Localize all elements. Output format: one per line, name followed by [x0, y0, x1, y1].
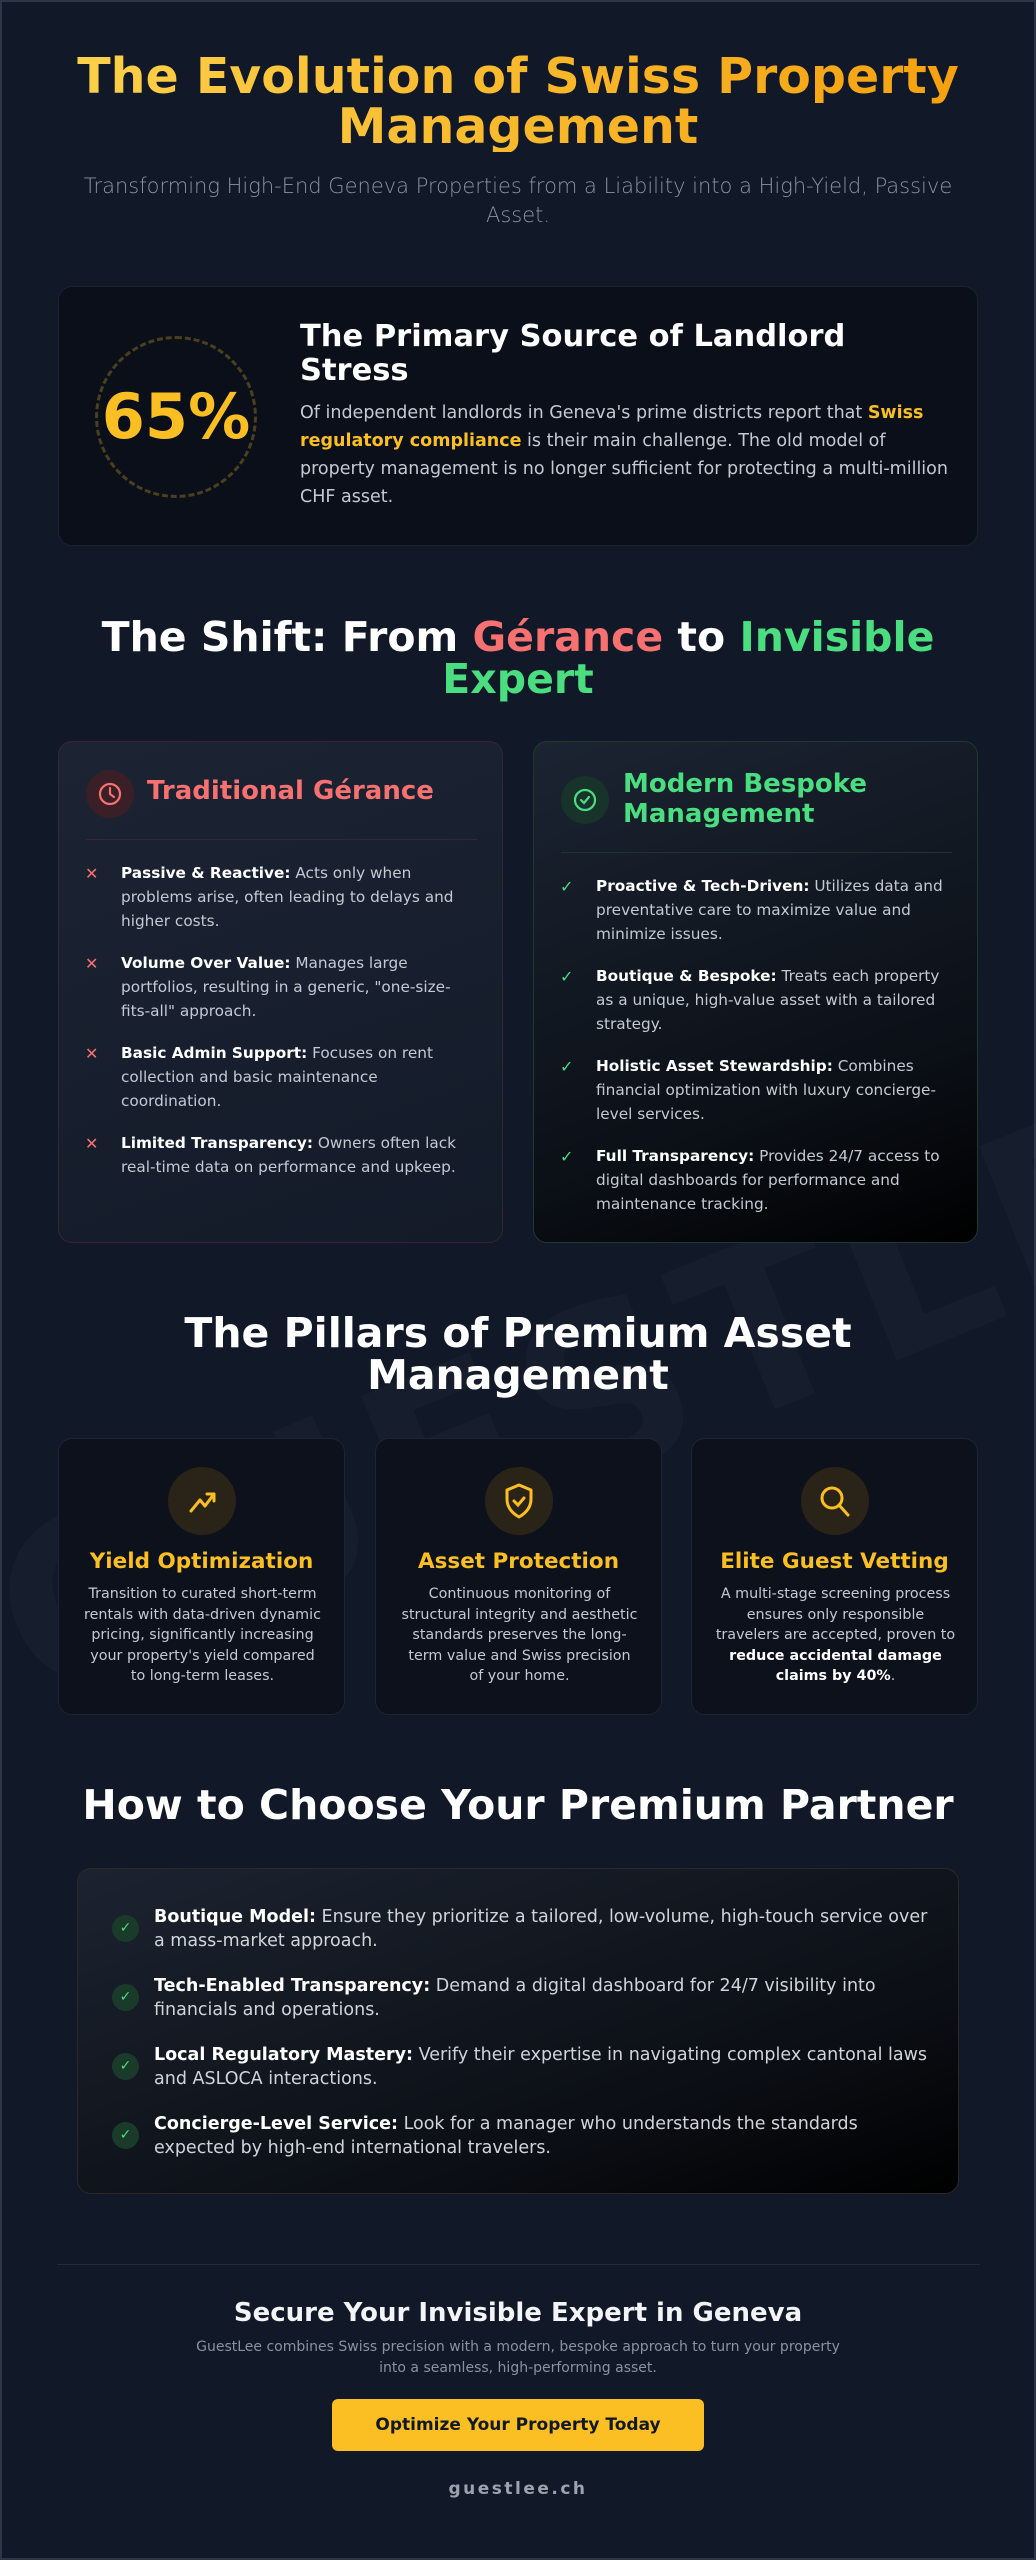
panel: traditional gerance: Limited Transparency: Owners often lack real-time data on performance and upkeep. — [121, 1134, 456, 1176]
panel: modern bespoke: ✓ — [560, 1057, 573, 1076]
panel: yield optimization — [58, 1438, 345, 1715]
panel: checklist: ✓ — [120, 1989, 131, 2005]
stat number: 65% — [102, 380, 250, 453]
CTA button — [332, 2399, 704, 2451]
panel: guest vetting: reduce accidental damage — [729, 1648, 942, 1664]
panel: modern bespoke: ✓ — [560, 877, 573, 896]
CTA heading: Secure Your Invisible Expert in Geneva — [234, 2298, 802, 2328]
panel: modern bespoke — [533, 741, 978, 1243]
heading: choose partner: How to Choose Your Premium Partner — [82, 1781, 954, 1829]
footer url: guestlee.ch — [448, 2479, 588, 2499]
panel: traditional gerance: ✕ — [85, 1134, 98, 1153]
heading: the shift: The Shift: From Gérance to Invisible Expert — [102, 613, 934, 703]
stat circle 65% — [95, 336, 257, 498]
panel: guest vetting: claims by 40%. — [776, 1668, 895, 1684]
panel: modern bespoke: Proactive & Tech-Driven: Utilizes data and preventative care to maximize value and minimize issues. — [596, 877, 943, 943]
panel: checklist: ✓ — [120, 2127, 131, 2143]
panel: guest vetting: Elite Guest Vetting — [720, 1549, 949, 1574]
panel: stat card — [58, 286, 978, 546]
title: The Evolution of Swiss Property Management — [77, 48, 959, 155]
checklist items — [112, 1907, 928, 2158]
panel: traditional gerance: Basic Admin Support: Focuses on rent collection and basic maintenance coordination. — [121, 1044, 433, 1110]
panel: traditional gerance: Volume Over Value: Manages large portfolios, resulting in a generic, "one-size-fits-all" approach. — [121, 954, 451, 1020]
panel: modern bespoke: Boutique & Bespoke: Treats each property as a unique, high-value asset with a tailored strategy. — [596, 967, 939, 1033]
panel: checklist: Tech-Enabled Transparency: Demand a digital dashboard for 24/7 visibility into financials and operations. — [154, 1976, 876, 2020]
panel: modern bespoke: ✓ — [560, 1147, 573, 1166]
panel: modern bespoke: ✓ — [560, 967, 573, 986]
panel: traditional gerance: Passive & Reactive: Acts only when problems arise, often leading to delays and higher costs. — [121, 864, 453, 930]
panel: guest vetting: travelers are accepted, proven to — [716, 1627, 955, 1643]
CTA text: GuestLee combines Swiss precision with a modern, bespoke approach to turn your property into a seamless, high-performing asset. — [196, 2339, 840, 2376]
panel: asset protection: Asset Protection — [418, 1549, 619, 1574]
panel: guest vetting — [691, 1438, 978, 1715]
icon: trend up — [168, 1467, 236, 1535]
list: modern — [560, 877, 943, 1213]
panel: traditional gerance — [58, 741, 503, 1243]
list: traditional — [85, 864, 456, 1176]
panel: checklist: Concierge-Level Service: Look for a manager who understands the standards expected by high-end international travelers. — [154, 2114, 858, 2158]
panel: modern bespoke: Full Transparency: Provides 24/7 access to digital dashboards for performance and maintenance tracking. — [596, 1147, 940, 1213]
stat body: Of independent landlords in Geneva's prime districts report that Swiss regulatory compliance is their main challenge. The old model of property management is no longer sufficient for protecting a multi-million CHF asset. — [300, 403, 948, 507]
panel: guest vetting: ensures only responsible — [747, 1606, 924, 1622]
panel: checklist: ✓ — [120, 2058, 131, 2074]
icon: clock — [86, 770, 134, 818]
panel: yield optimization: Yield Optimization — [90, 1549, 313, 1574]
icon: check circle — [561, 776, 609, 824]
panel: checklist — [77, 1868, 959, 2194]
panel: modern bespoke: Holistic Asset Stewardship: Combines financial optimization with luxury concierge-level services. — [596, 1057, 936, 1123]
panel: checklist: ✓ — [120, 1920, 131, 1936]
panel: asset protection: Continuous monitoring of structural integrity and aesthetic standards preserves the long-term value and Swiss precision of your home. — [402, 1586, 638, 1684]
CTA button: Optimize Your Property Today — [375, 2415, 661, 2435]
card title: Modern Bespoke Management — [623, 769, 867, 829]
panel: yield optimization: Transition to curated short-term rentals with data-driven dynamic pricing, significantly increasing your property's yield compared to long-term leases. — [84, 1586, 321, 1684]
icon: shield — [485, 1467, 553, 1535]
stat heading: The Primary Source of Landlord Stress — [300, 319, 845, 388]
icon: magnifier — [801, 1467, 869, 1535]
panel: traditional gerance: ✕ — [85, 864, 98, 883]
subtitle: Transforming High-End Geneva Properties from a Liability into a High-Yield, Passive Asset. — [84, 174, 952, 227]
panel: guest vetting: A multi-stage screening process — [721, 1586, 950, 1602]
card title: Traditional Gérance — [147, 776, 434, 806]
panel: checklist: Boutique Model: Ensure they prioritize a tailored, low-volume, high-touch service over a mass-market approach. — [154, 1907, 927, 1951]
panel: asset protection — [375, 1438, 662, 1715]
panel: traditional gerance: ✕ — [85, 954, 98, 973]
heading: pillars: The Pillars of Premium Asset Management — [184, 1309, 852, 1399]
panel: checklist: Local Regulatory Mastery: Verify their expertise in navigating complex cantonal laws and ASLOCA interactions. — [154, 2045, 927, 2089]
panel: traditional gerance: ✕ — [85, 1044, 98, 1063]
